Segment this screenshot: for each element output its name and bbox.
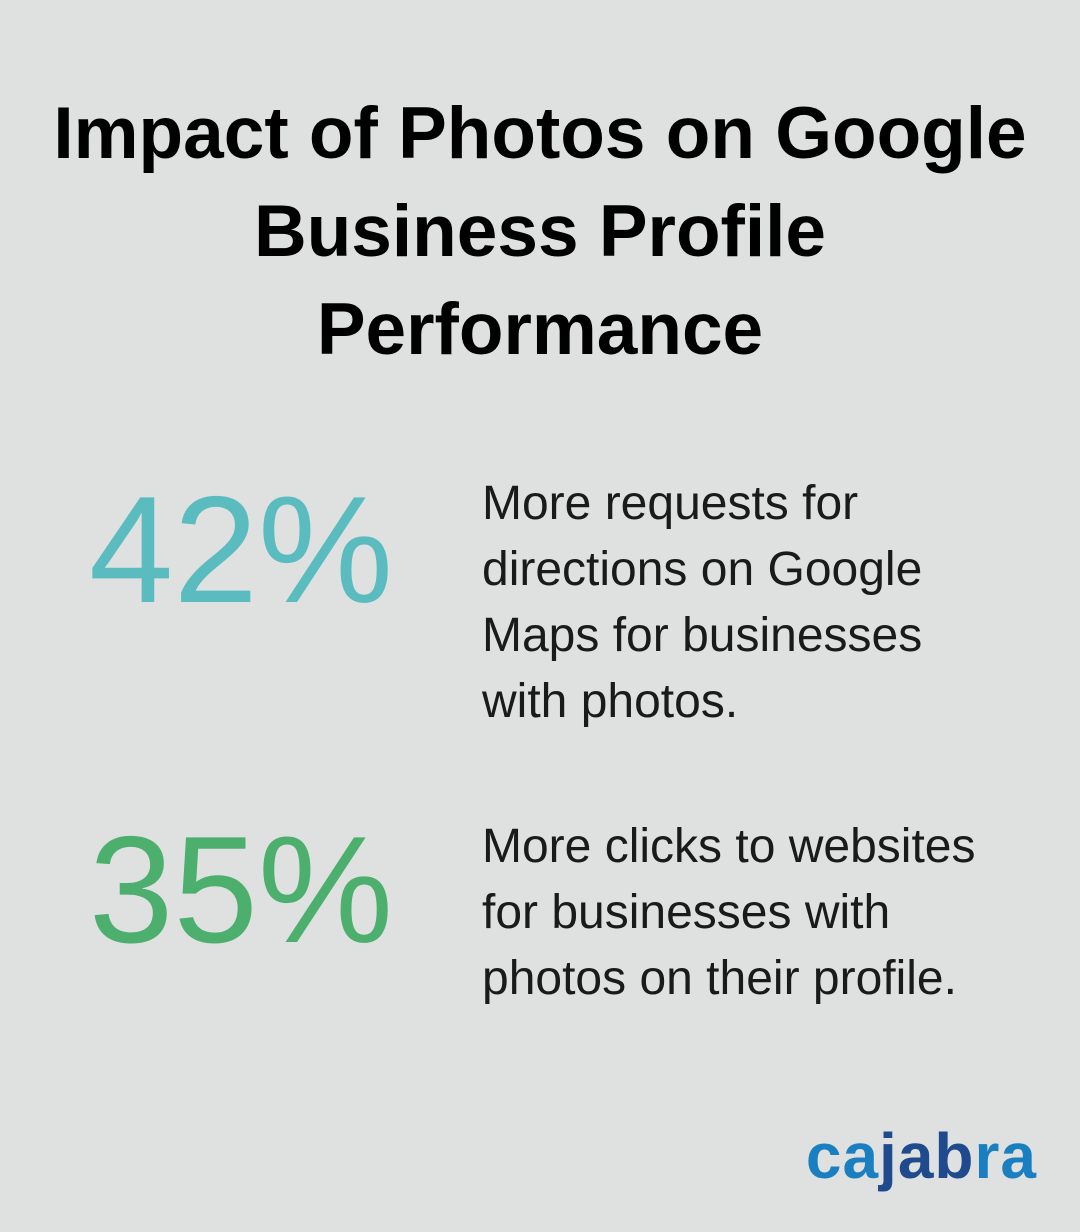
text block 1: directions on Google	[482, 543, 922, 596]
stat 1: 42%: 42%	[89, 465, 393, 635]
text block 1: Maps for businesses	[482, 609, 922, 662]
text block 1: with photos.	[482, 675, 738, 728]
text block 2	[482, 820, 975, 1005]
title	[53, 93, 1027, 370]
text block 2: More clicks to websites	[482, 820, 975, 873]
logo: cajabra: cajabra	[806, 1120, 1037, 1192]
text block 2: for businesses with	[482, 886, 890, 939]
title: Business Profile	[254, 191, 826, 272]
title: Performance	[317, 289, 763, 370]
title: Impact of Photos on Google	[53, 93, 1027, 174]
text block 2: photos on their profile.	[482, 952, 957, 1005]
text block 1	[482, 477, 922, 728]
stat 2: 35%: 35%	[89, 805, 393, 975]
text block 1: More requests for	[482, 477, 858, 530]
